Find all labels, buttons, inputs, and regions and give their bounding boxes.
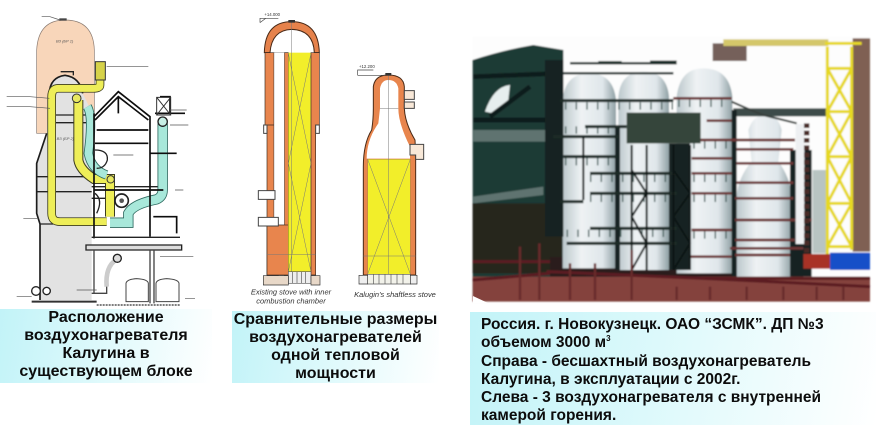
far left dark structure (473, 45, 563, 297)
diagram: comparative stove sizes (251, 12, 436, 305)
valve circles (72, 94, 81, 103)
vessel 3 (677, 68, 732, 273)
Kalugin vessel (737, 115, 792, 278)
silhouette outline (37, 75, 83, 300)
lower block (267, 225, 288, 275)
photo corner (473, 296, 488, 303)
level mark (260, 18, 278, 23)
bottom red platform (473, 277, 870, 302)
background beam (733, 108, 827, 116)
streaks on vessels (565, 103, 732, 235)
caption: comparative sizes: мощности (295, 365, 376, 382)
caption: Kalugin stove placement: воздухонагревателя (24, 327, 188, 344)
checker yellow (288, 53, 311, 272)
vessel horizontal lines (37, 72, 160, 224)
caption: comparative sizes: одной тепловой (271, 347, 400, 364)
caption: Kalugin stove placement: Расположение (48, 309, 164, 326)
grating (288, 272, 311, 283)
vertical stanchions (520, 243, 843, 300)
checker yellow (368, 159, 410, 274)
sky (473, 37, 870, 302)
caption: photo description: объемом 3000 м3 (481, 334, 611, 351)
shell right (311, 53, 319, 275)
caption: Kalugin stove placement: Калугина в (62, 345, 150, 362)
crane boom (723, 39, 828, 46)
pump (32, 287, 50, 295)
label: Kalugin stove: Kalugin's shaftless stove (354, 290, 436, 299)
shell (363, 75, 416, 275)
existing stove peach silhouette (37, 20, 94, 133)
level mark (358, 70, 385, 75)
haze behind crane (813, 170, 827, 253)
new stove grey silhouette (37, 75, 92, 300)
existing stove (258, 12, 320, 285)
sky gap (485, 85, 510, 113)
caption: Kalugin stove placement: существующем блоке (19, 363, 193, 380)
right pipework (799, 123, 815, 263)
connecting pipe (732, 102, 797, 123)
platform (86, 237, 182, 250)
vessel 2 (618, 72, 669, 270)
base flange (359, 275, 417, 284)
inner wall (284, 53, 288, 275)
dark base behind vessels (550, 257, 803, 287)
grating (368, 274, 410, 284)
lower left dark (473, 203, 563, 273)
curved duct (95, 150, 107, 213)
caption: photo description: камерой горения. (481, 407, 616, 424)
nozzles (258, 125, 319, 226)
Kalugin stove: +12.200 (359, 64, 375, 69)
tanks (126, 279, 179, 302)
top tower (157, 97, 171, 115)
dome (264, 22, 319, 53)
steel rings dark (553, 101, 677, 243)
valve top (95, 62, 105, 80)
caption: photo description (470, 312, 876, 425)
combustion chamber (274, 53, 284, 225)
ground line (32, 299, 97, 305)
caption: comparative sizes (232, 311, 439, 383)
caption: comparative sizes: Сравнительные размеры (234, 311, 437, 328)
diagram: Kalugin stove in existing block: ВЗ (БР 2) (57, 136, 75, 141)
cap (385, 73, 391, 76)
caption: photo description: Справа - бесшахтный воздухонагреватель (481, 353, 811, 370)
vessel 1 (563, 73, 616, 268)
nozzles (404, 91, 424, 159)
photo: stoves at ZSMK blast furnace 3 (473, 37, 870, 302)
label: existing stove: Existing stove with inner (251, 288, 332, 297)
dark green box (627, 113, 701, 143)
white riser pipe (796, 124, 804, 244)
hanging brown box (713, 43, 747, 61)
yellow crane (825, 43, 862, 260)
brown tower (853, 38, 870, 252)
round machine (115, 194, 128, 207)
red machinery (803, 254, 830, 269)
caption: comparative sizes: воздухонагревателей (249, 329, 422, 346)
diagram: Kalugin stove in existing block: ВЗ (БР 1) (56, 38, 74, 43)
dark upper lattice (473, 73, 560, 120)
caption: photo description: Калугина, в эксплуатации с 2002г. (481, 371, 740, 388)
dark gap rail (473, 262, 870, 287)
blue box (830, 253, 870, 270)
scaffold (583, 137, 690, 270)
cross lines (267, 20, 316, 283)
leader lines and blurred labels (7, 17, 195, 298)
hot blast pipe (52, 77, 110, 222)
cross lines (363, 75, 416, 283)
shell left (265, 53, 278, 275)
existing stove: +14.000 (264, 12, 281, 17)
cap (288, 20, 295, 23)
top walkway (563, 62, 677, 73)
left mid band (473, 130, 547, 227)
cold air pipe (87, 107, 163, 223)
building frame (94, 92, 185, 238)
label: existing stove: combustion chamber (256, 296, 326, 305)
lower pipes and columns (92, 250, 154, 303)
dark gaps between vessels (545, 60, 812, 277)
base flange (263, 276, 320, 285)
inner void (367, 80, 410, 159)
caption: Kalugin stove placement (0, 309, 212, 383)
Kalugin stove (358, 64, 424, 284)
caption: photo description: Слева - 3 воздухонагревателя с внутренней (481, 389, 821, 406)
caption: photo description: Россия. г. Новокузнецк. ОАО “ЗСМК”. ДП №3 (481, 316, 824, 333)
steel rings red (673, 98, 812, 257)
diagram: Kalugin stove in existing block (7, 17, 195, 305)
label: existing stove (251, 288, 332, 305)
dome cap (59, 18, 67, 21)
